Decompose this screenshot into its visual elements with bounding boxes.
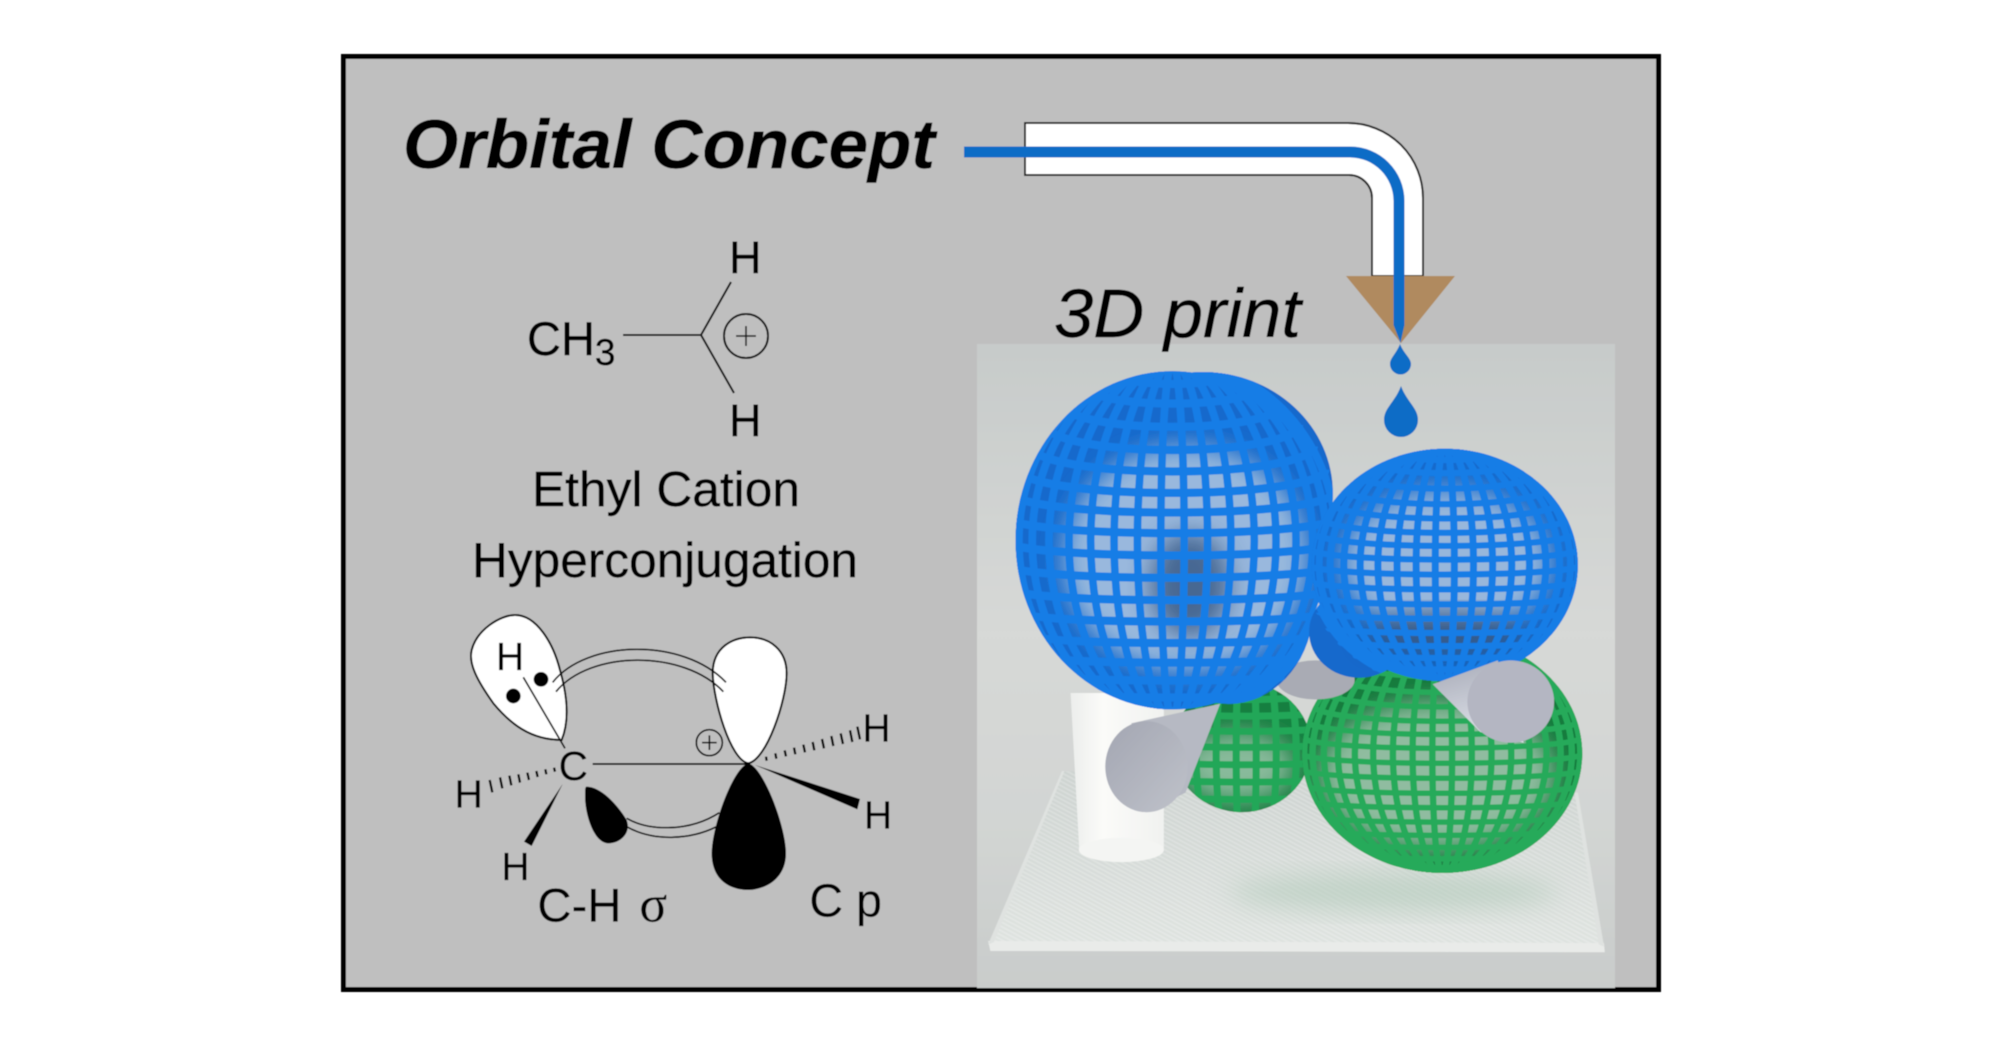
model in photo: [988, 362, 1605, 952]
label: C p: C p: [809, 875, 882, 927]
H bottom: H: [729, 395, 762, 446]
large green lobe: [1302, 657, 1583, 874]
left grey cylinder: [1105, 704, 1220, 812]
sigma symbol: σ: [639, 877, 667, 934]
icon: small drop: [1390, 344, 1411, 374]
central C: C: [559, 743, 588, 789]
wedge bond right: [755, 765, 860, 809]
C-C bond: [593, 761, 747, 766]
text: Hyperconjugation: Hyperconjugation: [472, 533, 858, 588]
C-H bond: [523, 677, 565, 748]
sigma orbital white lobe: [471, 615, 567, 740]
icon: large drop: [1384, 386, 1418, 437]
top overlap curves: [553, 649, 726, 692]
p orbital black lobe: [712, 763, 786, 890]
positive charge: [696, 730, 722, 756]
title: Orbital Concept: [403, 106, 938, 183]
photo: 3D printed orbital model: [977, 344, 1615, 988]
bonds: [623, 282, 734, 393]
tube: white extruder: [1025, 123, 1423, 276]
H bottom: H: [501, 846, 529, 889]
p orbital white lobe: [713, 637, 787, 763]
hashed bond right: [766, 727, 860, 761]
electrons: [506, 672, 548, 703]
nozzle: brown triangle: [1346, 276, 1455, 343]
hashed bond left: [490, 768, 555, 792]
structure: ethyl cation: [527, 232, 768, 446]
small blue lobe: [1307, 446, 1584, 689]
H right lower: H: [864, 794, 892, 837]
panel: grey framed background: [344, 56, 1658, 990]
photo background: [977, 344, 1615, 988]
H right upper: H: [862, 708, 890, 751]
labels: [455, 636, 892, 934]
base plate: [988, 771, 1605, 952]
bottom overlap curves: [627, 813, 719, 837]
wedge bond left: [524, 784, 563, 846]
CH3 label: 3: [595, 332, 615, 373]
diagram: hyperconjugation orbitals: [455, 615, 892, 934]
H top: H: [729, 232, 762, 283]
large blue lobe: [1006, 362, 1339, 720]
CH3 label: CH: [527, 312, 595, 365]
H left: H: [455, 773, 483, 816]
text: Ethyl Cation: Ethyl Cation: [532, 462, 800, 517]
H in lobe: H: [496, 636, 524, 679]
label: 3D print: 3D print: [1054, 275, 1304, 352]
label: C-H sigma: C-H: [537, 880, 621, 933]
right grey cylinder: [1433, 660, 1554, 743]
positive charge: [724, 314, 768, 358]
small green lobe: [1183, 688, 1308, 813]
sigma orbital black lobe: [585, 787, 628, 843]
infographic: [344, 56, 1658, 990]
filament: blue line: [964, 146, 1404, 343]
centre grey cylinder: [1277, 660, 1355, 699]
white support pillar: [1071, 693, 1164, 862]
